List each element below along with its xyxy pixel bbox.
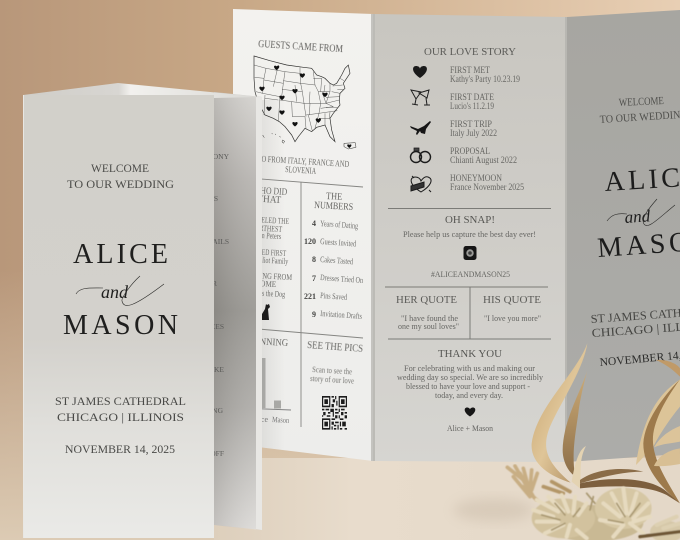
leaf: right palm — [636, 379, 680, 465]
timeline text: FIRST MET — [450, 65, 490, 75]
section: thank you: For celebrating with us and making our — [404, 363, 535, 373]
back page labels: DANCING — [188, 406, 224, 415]
cover names: MASON — [63, 310, 178, 341]
section: thank you: Alice + Mason — [447, 423, 494, 433]
icon: cocktail glasses — [411, 90, 430, 105]
icon: small heart — [465, 408, 475, 416]
back page labels: DINNER — [189, 279, 217, 288]
panel: love story centre panel — [373, 14, 567, 462]
section: the numbers: Pins Saved — [320, 290, 348, 302]
right panel names — [596, 161, 680, 264]
heading: guests came from: GUESTS CAME FROM — [258, 39, 343, 55]
section: planning chart: PLANNING — [243, 336, 288, 349]
timeline text: PROPOSAL — [450, 146, 490, 156]
cover welcome text: TO OUR WEDDING — [67, 179, 174, 191]
back page labels: VOWS — [196, 194, 218, 203]
leaf: small cream frond — [572, 446, 586, 488]
section: see the pics: Scan to see the — [312, 364, 353, 376]
script and: and — [101, 282, 129, 302]
panel: front cover of folded program — [23, 83, 262, 538]
section: the numbers: 8 — [312, 255, 316, 264]
timeline text — [450, 65, 524, 192]
section: quotes: one my soul loves" — [398, 321, 459, 331]
panel: right cover panel of open program — [567, 10, 680, 462]
section: planning chart — [240, 336, 291, 425]
section: the numbers: Years of Dating — [320, 218, 359, 231]
timeline text: HONEYMOON — [450, 173, 502, 183]
stems: brown leaves — [580, 469, 643, 483]
section: the numbers — [304, 191, 364, 321]
back page labels: COCKTAILS — [188, 237, 229, 246]
icon: black cat — [262, 304, 270, 320]
section: quotes: "I love you more" — [484, 313, 541, 323]
map: United States with hearts — [254, 56, 356, 149]
section: the numbers: 9 — [312, 310, 316, 319]
cover names: ALICE — [73, 239, 168, 270]
divider lines — [385, 208, 551, 339]
section: quotes: HIS QUOTE — [483, 295, 541, 306]
timeline text: Italy July 2022 — [450, 128, 497, 138]
section: thank you — [397, 349, 544, 433]
section: oh snap: OH SNAP! — [445, 215, 495, 226]
back page labels: CEREMONY — [187, 152, 230, 161]
section: see the pics: story of our love — [310, 373, 355, 386]
section: quotes: "I have found the — [401, 313, 458, 323]
section: who did what: HOME — [255, 278, 276, 289]
cover venue and date: NOVEMBER 14, 2025 — [65, 444, 175, 456]
section: the numbers: 221 — [304, 292, 316, 301]
section: the numbers: 7 — [312, 274, 316, 283]
section: the numbers: Dresses Tried On — [320, 272, 364, 285]
section: oh snap — [403, 215, 536, 279]
icon: airplane — [410, 121, 431, 135]
section: who did what — [243, 185, 293, 299]
section: thank you: THANK YOU — [438, 349, 502, 360]
top flap fold — [23, 83, 262, 98]
section: the numbers: Invitation Drafts — [320, 308, 362, 321]
cover venue and date: CHICAGO | ILLINOIS — [57, 410, 184, 424]
right panel welcome text: WELCOME — [619, 95, 664, 109]
section: thank you: blessed to have your love and support - — [406, 381, 530, 391]
section: who did what: MARRIED FIRST — [243, 246, 287, 258]
caption: also from: ALSO FROM ITALY, FRANCE AND — [249, 153, 350, 169]
back page labels: CUT THE CAKE — [171, 365, 224, 374]
section: who did what: FARTHEST — [252, 222, 283, 234]
section: who did what: The Eliot Family — [248, 254, 289, 266]
back page labels: SEND OFF — [189, 449, 224, 458]
section: thank you: today, and every day. — [435, 390, 503, 400]
section: who did what: TRAVELED THE — [246, 214, 289, 226]
feather: left frond — [507, 466, 570, 500]
timeline text: Lucio's 11.2.19 — [450, 101, 494, 111]
timeline text: Kathy's Party 10.23.19 — [450, 74, 520, 84]
section: see the pics: SEE THE PICS — [307, 340, 363, 355]
pampas: fluffy plumes — [532, 488, 680, 540]
table dividers — [235, 177, 363, 427]
right panel welcome text — [599, 95, 680, 126]
section: the numbers: 4 — [312, 219, 316, 228]
cover welcome text — [67, 163, 174, 191]
icon: heart with banner — [411, 176, 431, 192]
QR code — [322, 396, 347, 430]
section: thank you: wedding day so special. We are so incredibly — [397, 372, 544, 382]
section: oh snap: #ALICEANDMASON25 — [431, 269, 510, 279]
section: see the pics — [307, 340, 363, 430]
right panel venue and date — [590, 303, 680, 369]
heading: our love story: OUR LOVE STORY — [424, 46, 516, 58]
section: who did what: WHAT — [254, 194, 281, 206]
timeline text: FIRST DATE — [450, 92, 494, 102]
section: oh snap: Please help us capture the best day ever! — [403, 229, 536, 239]
section: who did what: WHO DID — [253, 185, 287, 198]
script and: and — [624, 206, 651, 227]
section: who did what: STAYING FROM — [244, 269, 293, 282]
back page labels: TOASTEES — [187, 322, 224, 331]
leaf: right palm top — [656, 360, 680, 377]
section: the numbers: 120 — [304, 237, 316, 246]
white page edge — [256, 97, 262, 530]
section: the numbers: NUMBERS — [314, 200, 353, 213]
caption: also from — [249, 153, 350, 176]
back page labels — [171, 152, 230, 458]
section: the numbers: THE — [326, 191, 342, 203]
section: planning chart: Alice — [251, 415, 268, 424]
section: who did what: Was the Dog — [254, 287, 286, 299]
section: the numbers: Cakes Tasted — [320, 254, 354, 266]
icon: wedding rings — [410, 148, 430, 162]
cover welcome text: WELCOME — [91, 163, 149, 175]
timeline text: Chianti August 2022 — [450, 155, 517, 165]
icon: heart — [413, 66, 427, 78]
leaf: narrow curved — [563, 371, 587, 476]
section: quotes: HER QUOTE — [396, 295, 457, 306]
timeline text: France November 2025 — [450, 182, 524, 192]
cover venue and date: ST JAMES CATHEDRAL — [55, 394, 186, 408]
icon: instagram camera — [464, 246, 476, 260]
leaf: large curved — [532, 343, 587, 483]
section: who did what: Ann Peters — [254, 230, 281, 241]
cover venue and date — [55, 394, 186, 456]
cover names — [63, 239, 178, 341]
caption: also from: SLOVENIA — [285, 164, 317, 176]
panel: folded program back pages — [171, 92, 262, 530]
section: the numbers: Guests Invited — [320, 236, 357, 249]
section: quotes — [396, 295, 541, 331]
section: planning chart: Mason — [272, 415, 289, 425]
timeline text: FIRST TRIP — [450, 119, 492, 129]
panel: white inner panel — [233, 9, 373, 461]
decoration: dried pampas and palm leaves — [453, 343, 680, 540]
